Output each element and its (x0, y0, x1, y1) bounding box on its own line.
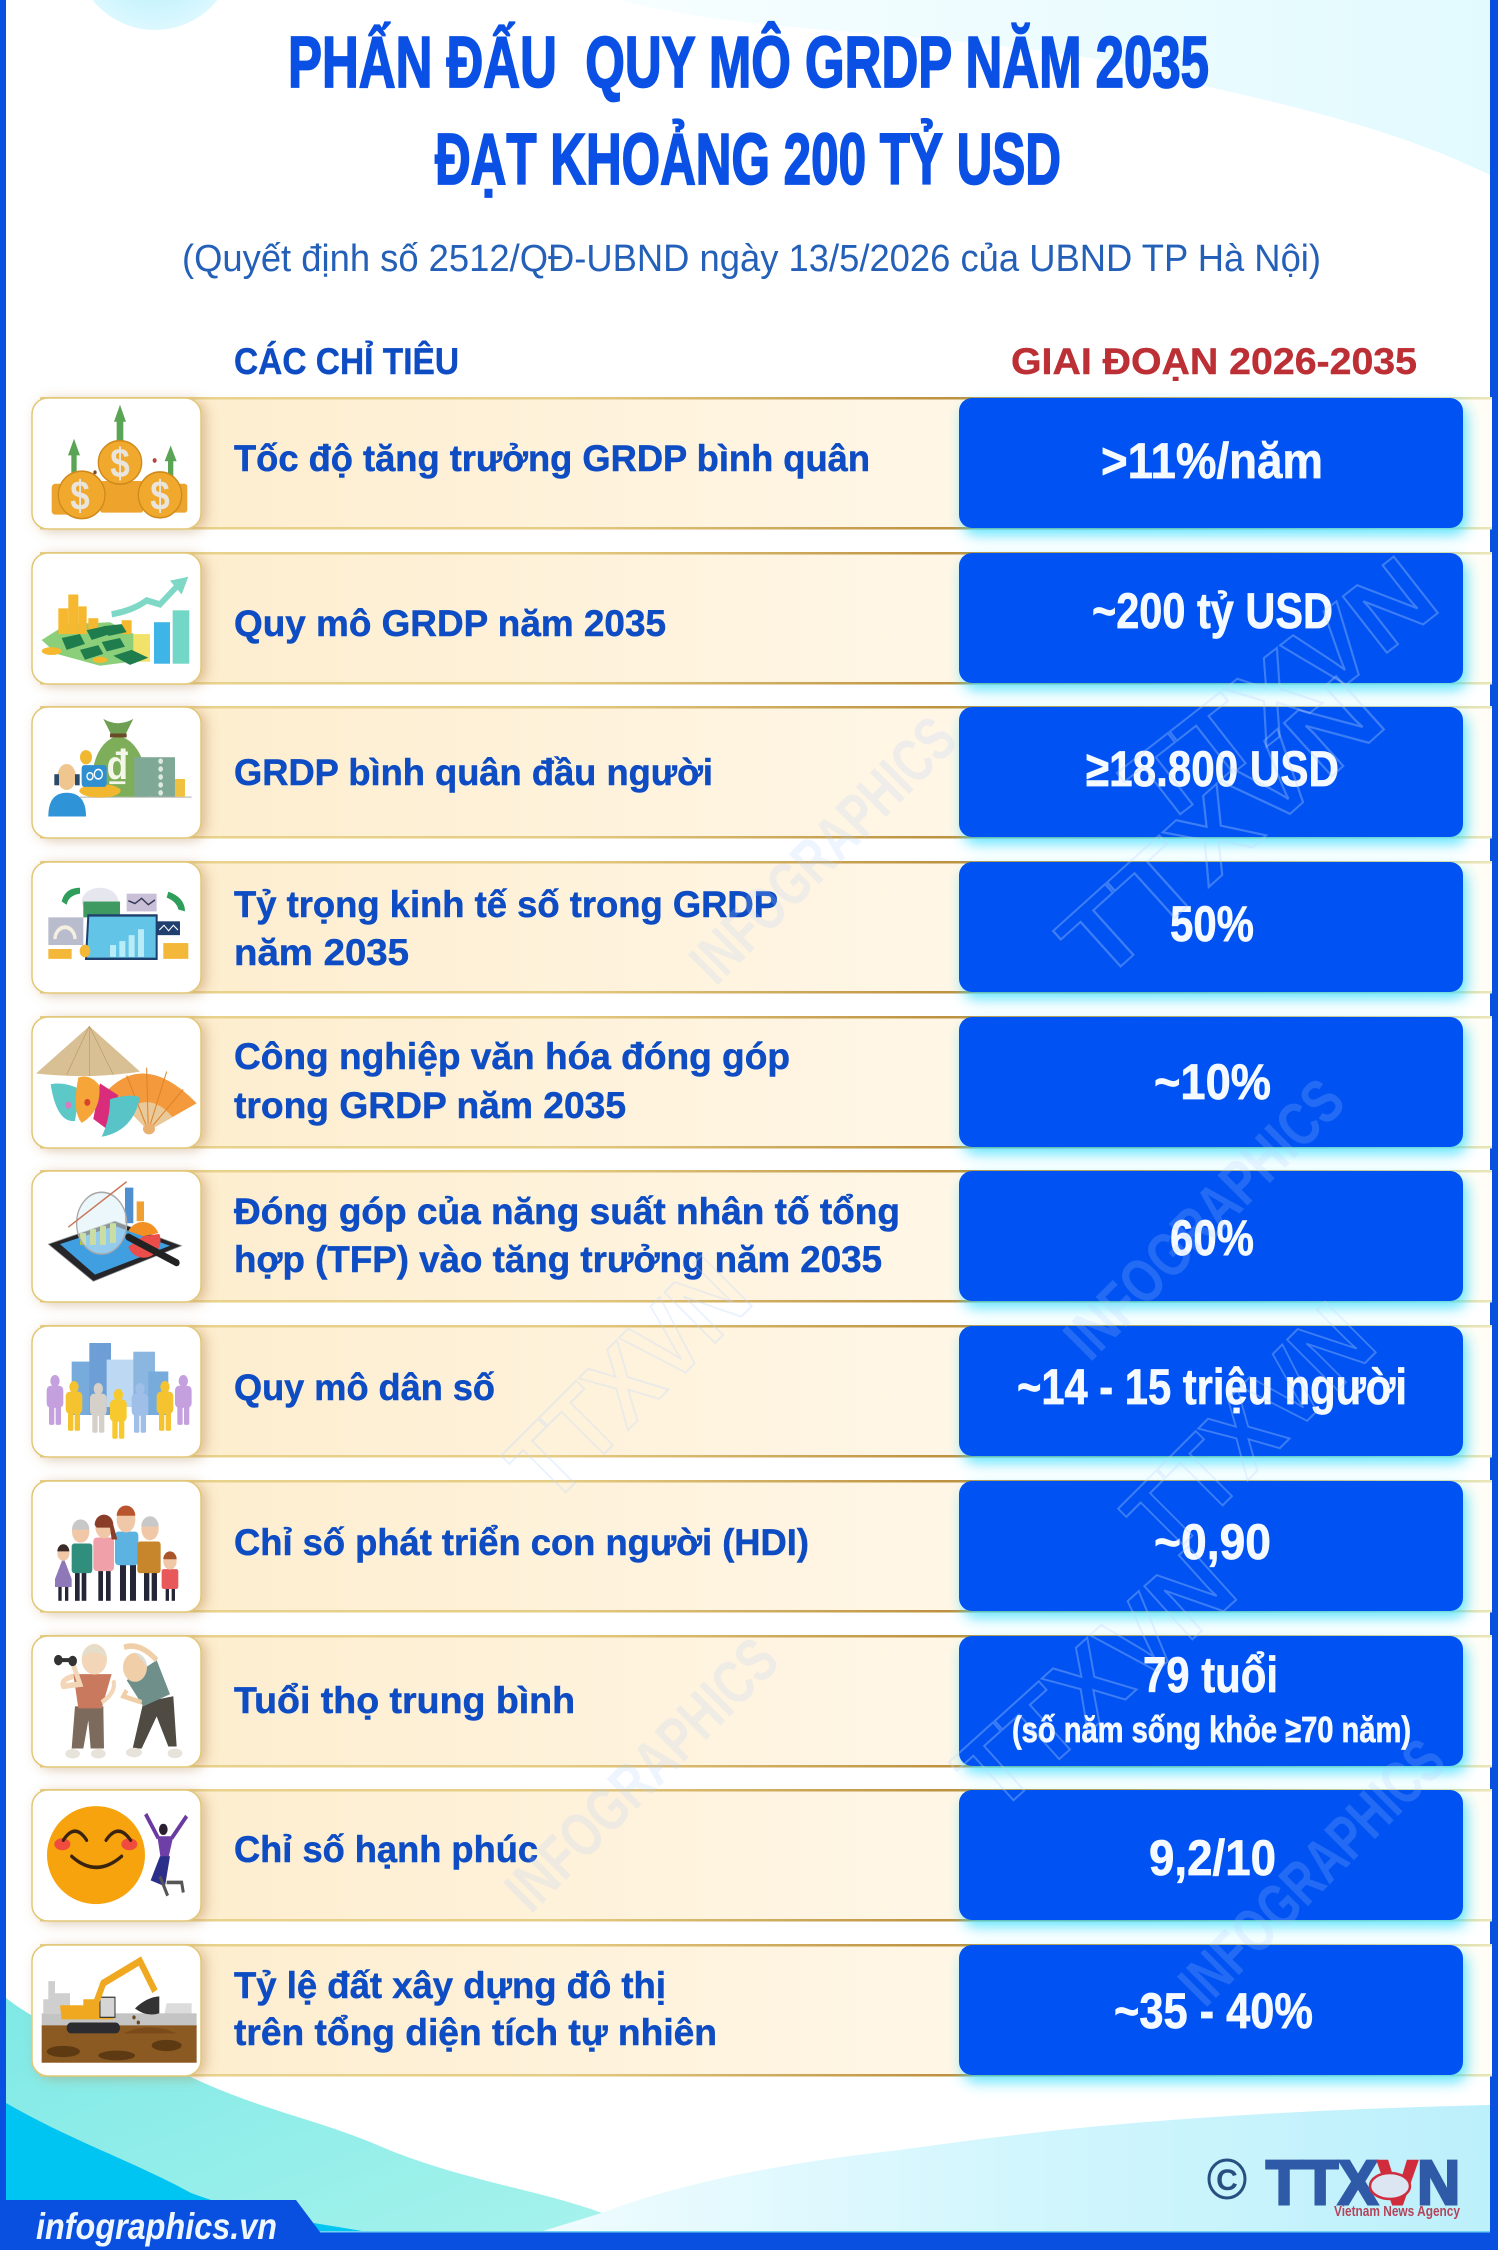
icon: coins and arrows: $ (150, 473, 170, 520)
watermarks: INFOGRAPHICS (1051, 1066, 1358, 1373)
row 9: life expectancy (32, 1635, 1492, 1768)
value box (959, 862, 1463, 992)
row 2: GRDP size (32, 552, 1492, 684)
bottom right pale blue swoosh (540, 2105, 1490, 2232)
row 5: cultural industry (32, 1016, 1492, 1148)
value box: 79 tuổi (1143, 1647, 1278, 1703)
label: Công nghiệp văn hóa đóng góp (234, 1036, 790, 1077)
value box: (số năm sống khỏe ≥70 năm) (1012, 1709, 1411, 1750)
icon: coins and arrows: $ (110, 441, 130, 487)
label: Chỉ số phát triển con người (HDI) (234, 1522, 809, 1563)
bottom left cyan wave (6, 2103, 368, 2232)
watermarks: INFOGRAPHICS (492, 1625, 792, 1925)
icon: family (32, 1481, 201, 1612)
logo: TTXVN: C (1216, 2164, 1238, 2197)
icon: elderly people exercising (32, 1636, 201, 1767)
value box: ~0,90 (1154, 1514, 1271, 1570)
subtitle: (Quyết định số 2512/QĐ-UBND ngày 13/5/2026 của UBND TP Hà Nội) (182, 238, 1321, 280)
icon: digital tablet and charts (32, 862, 201, 993)
value box: ~200 tỷ USD (1092, 583, 1333, 639)
row 10: happiness index (32, 1789, 1492, 1922)
row 6: TFP contribution (32, 1170, 1492, 1302)
row 3: GRDP per capita (32, 706, 1492, 838)
bottom bar (0, 2231, 1498, 2250)
icon: money bag and person (32, 707, 201, 838)
bottom left teal wave (6, 1998, 602, 2232)
watermarks: TTXVN (934, 1526, 1257, 1833)
top left circle (75, 0, 235, 30)
top right light blue shape (620, 0, 1490, 175)
value box: 50% (1170, 896, 1254, 952)
value box: ~14 - 15 triệu người (1017, 1359, 1407, 1415)
footer tab: infographics.vn: infographics.vn (36, 2206, 277, 2247)
watermarks: TTXVN (1102, 1282, 1396, 1576)
label: Đóng góp của năng suất nhân tố tổng (234, 1191, 900, 1232)
icon: money bag and person: đ (107, 742, 129, 789)
label line 2: trên tổng diện tích tự nhiên (234, 2012, 717, 2053)
value box: ~35 - 40% (1114, 1983, 1313, 2039)
value box (959, 1326, 1463, 1456)
column heading: indicators: CÁC CHỈ TIÊU (234, 340, 459, 382)
row 1: GRDP growth (32, 397, 1492, 530)
label line 2: hợp (TFP) vào tăng trưởng năm 2035 (234, 1239, 882, 1280)
value box (959, 1017, 1463, 1147)
icon: conical hat, masks and fan (32, 1017, 201, 1148)
left border (0, 0, 6, 2250)
value box (959, 398, 1463, 528)
right border (1490, 0, 1498, 2250)
column heading: period: GIAI ĐOẠN 2026-2035 (1011, 341, 1417, 382)
row 8: HDI (32, 1480, 1492, 1612)
row 7: population (32, 1325, 1492, 1458)
value box (959, 1171, 1463, 1301)
value box: 60% (1170, 1210, 1254, 1266)
value box: 9,2/10 (1149, 1830, 1276, 1886)
label: Tỷ lệ đất xây dựng đô thị (234, 1965, 666, 2006)
row 4: digital economy (32, 861, 1492, 994)
watermarks (485, 535, 1459, 2019)
label: Tuổi thọ trung bình (234, 1680, 575, 1721)
value box: ≥18.800 USD (1086, 741, 1339, 797)
row 11: urban land ratio (32, 1944, 1492, 2076)
value box (959, 1481, 1463, 1611)
title: ĐẠT KHOẢNG 200 TỶ USD (435, 119, 1061, 200)
watermarks: TTXVN (1038, 655, 1405, 1002)
label: Tốc độ tăng trưởng GRDP bình quân (234, 438, 870, 479)
value box (959, 553, 1463, 683)
label: Tỷ trọng kinh tế số trong GRDP (234, 884, 778, 925)
icon: smiley and jumping person (32, 1790, 201, 1921)
value box: ~10% (1154, 1054, 1271, 1110)
value box: >11%/năm (1101, 433, 1323, 489)
label line 2: năm 2035 (234, 932, 409, 973)
watermarks: INFOGRAPHICS (677, 704, 970, 997)
icon: people and city (32, 1326, 201, 1457)
value box (959, 1945, 1463, 2075)
watermarks: TTXVN (1103, 535, 1458, 848)
logo: TTXVN: Vietnam News Agency (1334, 2204, 1460, 2220)
icon: coins and arrows (32, 398, 201, 529)
value box (959, 1790, 1463, 1920)
label: Chỉ số hạnh phúc (234, 1829, 538, 1870)
label line 2: trong GRDP năm 2035 (234, 1085, 626, 1126)
logo: TTXVN: TTXVN (1266, 2149, 1460, 2218)
icon: tablet with magnifier (32, 1171, 201, 1302)
value box (959, 707, 1463, 837)
icon: excavator on soil (32, 1945, 201, 2076)
label: Quy mô GRDP năm 2035 (234, 603, 666, 644)
icon: money and growth chart (32, 553, 201, 684)
watermarks: TTXVN (485, 1236, 772, 1523)
label: Quy mô dân số (234, 1367, 495, 1408)
value box (959, 1636, 1463, 1766)
title (288, 22, 1209, 200)
icon: coins and arrows: $ (70, 473, 90, 520)
label: GRDP bình quân đầu người (234, 752, 713, 793)
